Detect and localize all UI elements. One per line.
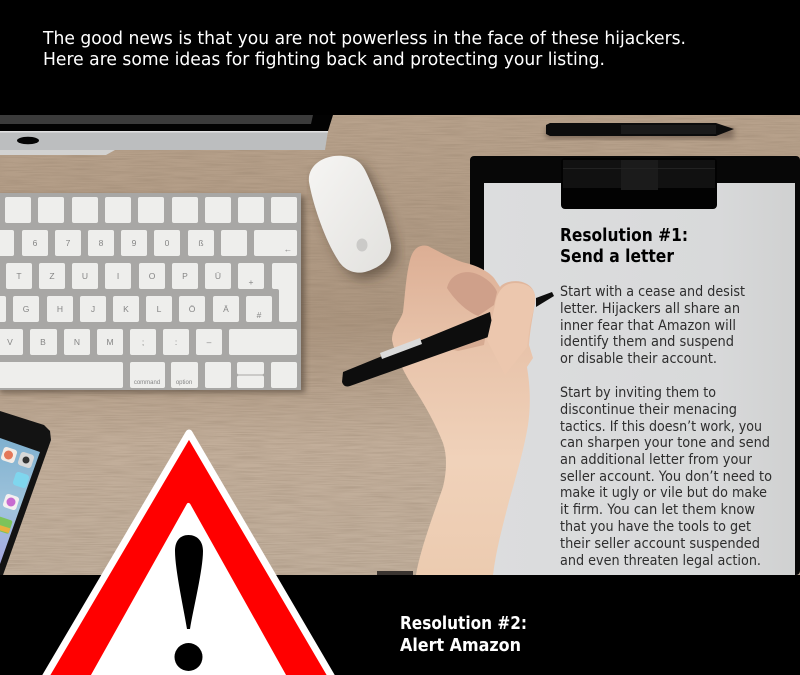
keys row 6 <box>0 362 297 388</box>
pen on desk <box>546 123 734 139</box>
keys row 6: option <box>176 380 192 386</box>
icon: monitor logo <box>17 137 39 144</box>
keys row 4: G <box>23 304 29 314</box>
keys row 3: U <box>82 271 88 281</box>
keys row 3: O <box>149 271 156 281</box>
resolution 1 second paragraph: make it ugly or vile but do make <box>560 485 767 501</box>
keyboard <box>0 193 305 393</box>
keys row 4: J <box>91 304 95 314</box>
keys row 3: Z <box>49 271 55 281</box>
keys row 4: H <box>57 304 63 314</box>
warning triangle sign <box>44 433 333 675</box>
hand holding pen <box>342 246 554 575</box>
icon: mouse logo <box>356 238 368 252</box>
clipboard <box>470 156 800 575</box>
keys row 2 <box>0 230 297 256</box>
keys row 2: ß <box>198 238 204 248</box>
sign inner panel <box>91 505 286 675</box>
resolution 1 first paragraph: identify them and suspend <box>560 334 734 350</box>
keys row 2: ← <box>284 244 292 254</box>
monitor <box>0 115 333 155</box>
resolution 1 second paragraph: an additional letter from your <box>560 452 752 468</box>
pen in hand <box>342 292 554 386</box>
keys row 6: command <box>134 380 160 386</box>
keys row 1 <box>5 197 297 223</box>
resolution 1 first paragraph <box>560 284 745 367</box>
keys row 5: B <box>40 337 46 347</box>
resolution 1 first paragraph: Start with a cease and desist <box>560 284 745 300</box>
keys row 4: K <box>123 304 129 314</box>
clipboard clip <box>561 158 717 209</box>
keys row 4: # <box>257 310 262 320</box>
resolution 1 second paragraph: Start by inviting them to <box>560 385 716 401</box>
keys row 3: Ü <box>215 271 221 281</box>
resolution 1 second paragraph: it firm. You can let them know <box>560 502 755 518</box>
keys row 2: 8 <box>99 238 104 248</box>
resolution 1 second paragraph: tactics. If this doesn’t work, you <box>560 419 762 435</box>
keys row 5: M <box>106 337 114 347</box>
resolution 1 heading: Send a letter <box>560 246 674 267</box>
thumb <box>487 283 535 375</box>
index finger shading <box>447 272 497 316</box>
keys row 4: Ö <box>189 304 196 314</box>
resolution 1 first paragraph: letter. Hijackers all share an <box>560 301 740 317</box>
keys row 2: 6 <box>33 238 38 248</box>
keys row 2: 9 <box>132 238 137 248</box>
resolution 1 second paragraph <box>560 385 772 569</box>
phone <box>0 411 51 575</box>
resolution 1 second paragraph: seller account. You don’t need to <box>560 469 772 485</box>
keys row 4: L <box>157 304 162 314</box>
keys row 4 <box>0 296 272 322</box>
resolution 1 second paragraph: can sharpen your tone and send <box>560 435 770 451</box>
keys row 5: – <box>207 337 212 347</box>
icon: phone app icons <box>0 446 35 534</box>
resolution 2 heading: Alert Amazon <box>400 635 521 656</box>
keys row 3: T <box>16 271 22 281</box>
resolution 2 heading: Resolution #2: <box>400 613 527 634</box>
intro text: The good news is that you are not powerless in the face of these hijackers. <box>42 28 686 49</box>
intro text <box>42 28 686 70</box>
resolution 1 heading: Resolution #1: <box>560 225 688 246</box>
desk photo background <box>0 115 800 575</box>
keys row 2: 7 <box>66 238 71 248</box>
keys row 2: 0 <box>165 238 170 248</box>
keys row 4: Ä <box>223 304 229 314</box>
resolution 1 second paragraph: and even threaten legal action. <box>560 553 761 569</box>
keys row 3: I <box>117 271 119 281</box>
resolution 1 heading <box>560 225 688 267</box>
resolution 1 first paragraph: or disable their account. <box>560 351 717 367</box>
resolution 2 heading <box>400 613 527 656</box>
keys row 5: : <box>175 337 177 347</box>
intro text: Here are some ideas for fighting back and protecting your listing. <box>43 49 605 70</box>
palm shadow under pen <box>440 326 487 351</box>
resolution 1 second paragraph: discontinue their menacing <box>560 402 737 418</box>
resolution 1 second paragraph: that you have the tools to get <box>560 519 751 535</box>
keys row 3: P <box>182 271 188 281</box>
keys row 3 <box>6 263 297 322</box>
keys row 3: + <box>249 277 254 287</box>
keys row 5 <box>0 329 297 355</box>
keys row 5: ; <box>142 337 144 347</box>
resolution 1 second paragraph: their seller account suspended <box>560 536 760 552</box>
icon: exclamation mark <box>174 535 203 671</box>
keys row 5: N <box>74 337 80 347</box>
mouse <box>309 156 397 279</box>
keys row 5: V <box>7 337 13 347</box>
resolution 1 first paragraph: inner fear that Amazon will <box>560 318 736 334</box>
